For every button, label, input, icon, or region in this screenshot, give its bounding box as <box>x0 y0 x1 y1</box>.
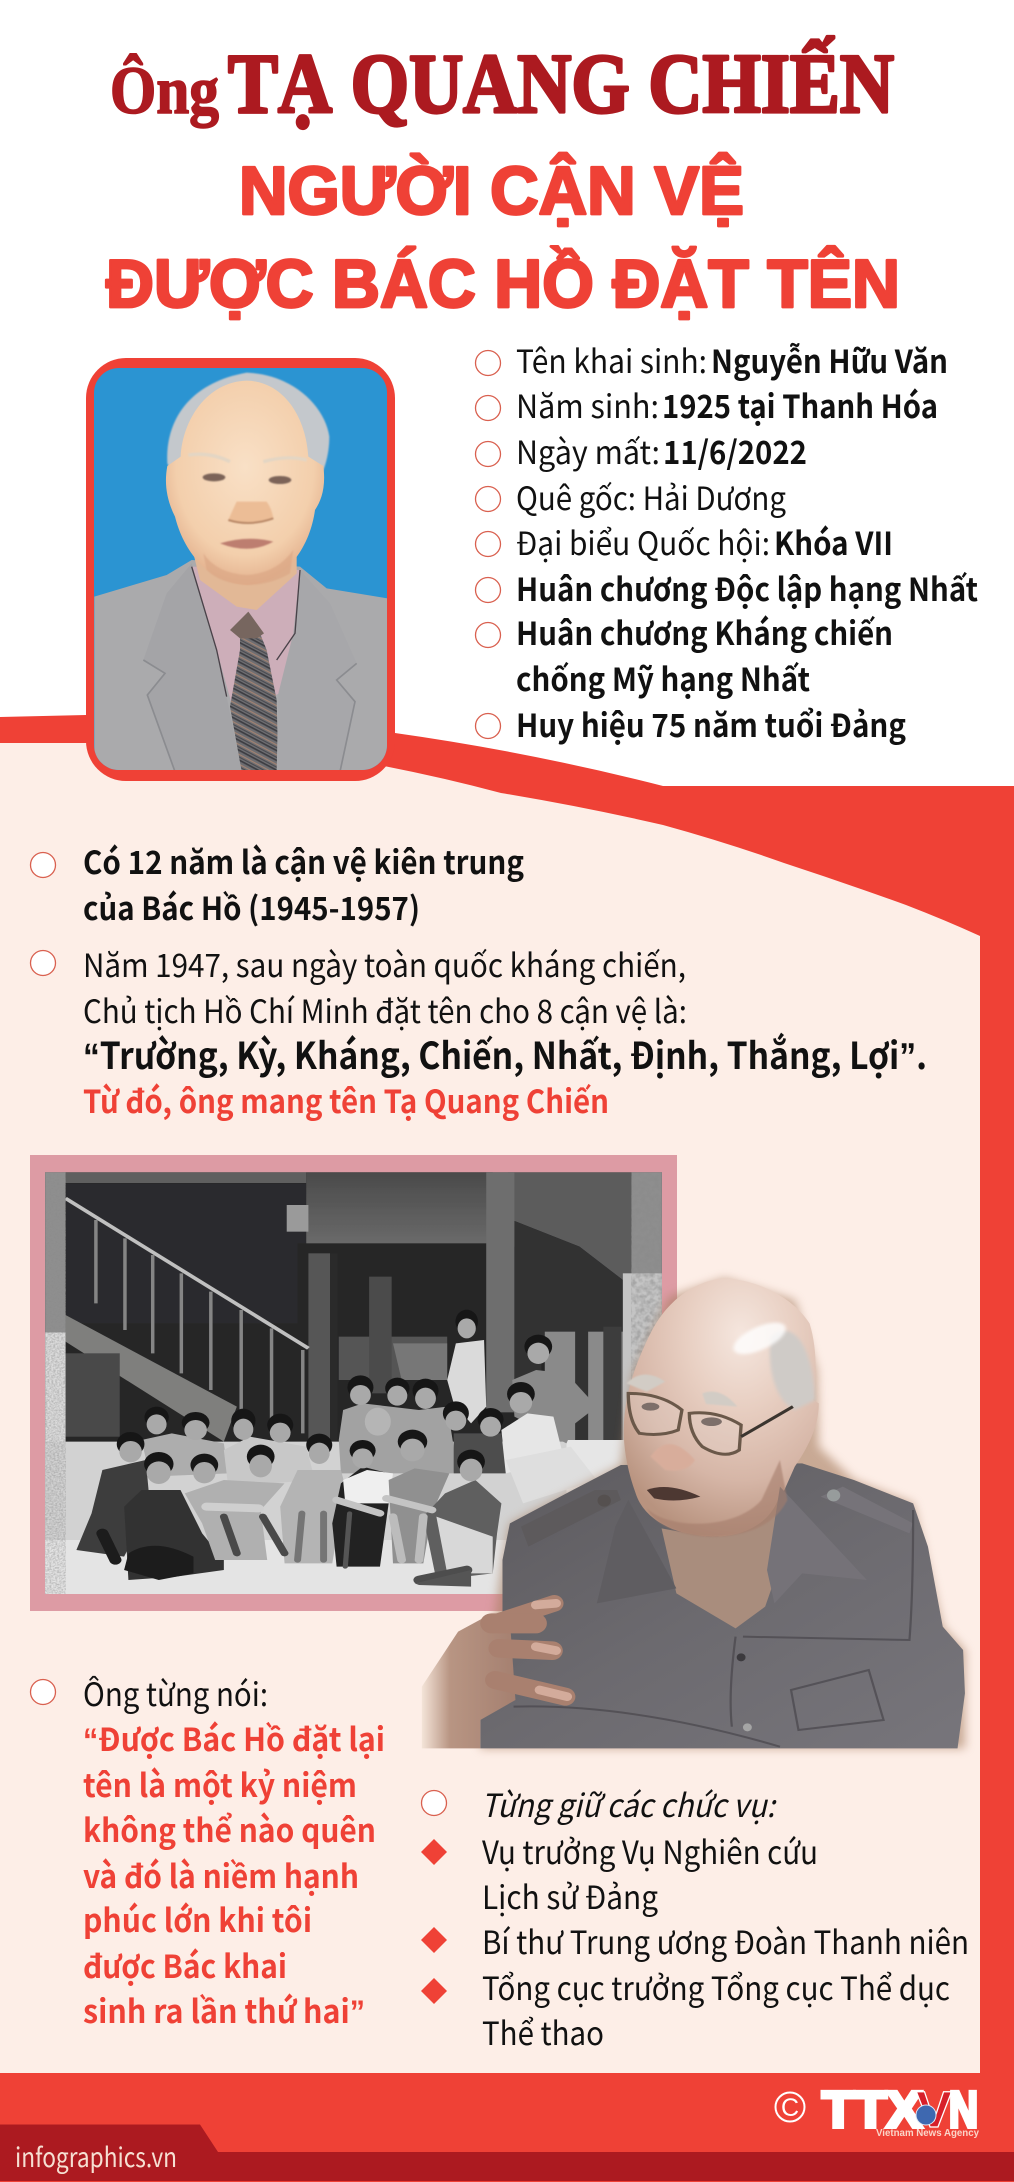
eyes <box>642 1403 659 1411</box>
lapels <box>192 566 242 770</box>
standing figures <box>447 1340 486 1423</box>
fact text lines: chống Mỹ hạng Nhất <box>516 655 810 701</box>
faces <box>119 1318 549 1484</box>
red background curve and side strip <box>0 715 1014 2182</box>
agency name: Vietnam News Agency <box>876 2128 979 2139</box>
fact text lines: Huân chương Kháng chiến <box>516 609 893 655</box>
shadow halo <box>480 1278 965 1748</box>
shirt folds <box>514 1510 913 1747</box>
diamond markers <box>421 1839 447 2004</box>
footer band <box>0 2124 1014 2181</box>
title line: Ông Tạ Quang Chiến: Ông <box>110 52 219 128</box>
bodyguard statement: Có 12 năm là cận vệ kiên trung <box>83 838 524 884</box>
quotation text: phúc lớn khi tôi <box>83 1896 312 1942</box>
copyright mark: C <box>781 2094 799 2122</box>
naming story: “Trường, Kỳ, Kháng, Chiến, Nhất, Định, Thắng, Lợi”. <box>83 1026 927 1080</box>
naming story <box>83 941 927 1123</box>
agency wordmark: TTX <box>822 2081 922 2138</box>
quotation text: “Được Bác Hồ đặt lại <box>83 1715 385 1761</box>
building <box>66 1172 306 1183</box>
bullets <box>30 852 56 976</box>
naming story: Chủ tịch Hồ Chí Minh đặt tên cho 8 cận vệ là: <box>83 987 687 1033</box>
positions held block <box>421 1781 969 2055</box>
suit <box>94 560 387 772</box>
arm and palm <box>422 1617 515 1748</box>
agency wordmark: V <box>916 2081 952 2138</box>
fact text lines: Huân chương Độc lập hạng Nhất <box>516 565 978 611</box>
positions: Thể thao <box>482 2009 604 2055</box>
grain on light edges <box>45 1172 66 1594</box>
portrait photo with red rounded frame <box>86 358 395 781</box>
fact text lines: Huy hiệu 75 năm tuổi Đảng <box>516 701 906 747</box>
positions: Vụ trưởng Vụ Nghiên cứu <box>482 1828 818 1874</box>
title <box>106 36 900 322</box>
career text block <box>30 838 927 1123</box>
fact text lines: Đại biểu Quốc hội: <box>516 519 770 565</box>
globe <box>916 2105 936 2125</box>
historic group photo in pink frame <box>30 1155 677 1611</box>
fact text lines: Năm sinh: <box>516 382 659 428</box>
quotation text: được Bác khai <box>83 1942 287 1988</box>
front row bodies <box>124 1490 224 1580</box>
copyright mark <box>776 2092 804 2122</box>
lower face shading <box>647 1460 787 1537</box>
naming story: Từ đó, ông mang tên Tạ Quang Chiến <box>83 1077 609 1123</box>
stair <box>66 1315 237 1442</box>
title line: Ông Tạ Quang Chiến: TẠ QUANG CHIẾN <box>228 36 894 131</box>
seated mid rows <box>339 1403 456 1473</box>
quotation text <box>83 1715 385 2033</box>
hair <box>167 373 329 483</box>
bullet <box>422 1790 446 1816</box>
facial features <box>188 454 307 585</box>
fact text lines: Nguyễn Hữu Văn <box>711 337 948 383</box>
mottled edges <box>45 1172 66 1332</box>
fact text lines: Quê gốc: Hải Dương <box>516 474 786 520</box>
heading: Từng giữ các chức vụ: <box>481 1781 777 1827</box>
fact text lines <box>516 337 978 747</box>
bodyguard statement: của Bác Hồ (1945-1957) <box>83 884 420 930</box>
head <box>166 381 324 585</box>
agency wordmark: N <box>949 2081 978 2138</box>
feet and dog <box>124 1546 193 1580</box>
fact text lines: 11/6/2022 <box>663 428 807 474</box>
hair <box>770 1331 815 1410</box>
forehead shine <box>728 1316 791 1361</box>
cream content panel <box>0 743 980 2073</box>
fact text lines: 1925 tại Thanh Hóa <box>662 382 938 428</box>
shirt <box>480 1463 965 1748</box>
ground <box>45 1442 566 1540</box>
quote intro: Ông từng nói: <box>83 1670 268 1716</box>
TTXVN logo <box>776 2081 979 2139</box>
hair <box>117 1310 552 1476</box>
neck <box>193 553 297 610</box>
quotation text: sinh ra lần thứ hai” <box>83 1987 365 2033</box>
neck and chest <box>662 1493 784 1628</box>
quotation text: không thể nào quên <box>83 1806 376 1852</box>
glasses <box>628 1393 741 1454</box>
positions: Lịch sử Đảng <box>482 1873 658 1919</box>
fact text lines: Ngày mất: <box>516 428 660 474</box>
arms and legs <box>102 1498 467 1580</box>
subtitle lines <box>106 152 900 322</box>
portrait of Tạ Quang Chiến gesturing <box>422 1278 965 1748</box>
positions <box>482 1828 969 2055</box>
collars <box>597 1500 676 1603</box>
naming story: Năm 1947, sau ngày toàn quốc kháng chiến, <box>83 941 686 987</box>
head <box>624 1278 819 1537</box>
subtitle lines: ĐƯỢC BÁC HỒ ĐẶT TÊN <box>106 245 900 322</box>
source label: infographics.vn <box>15 2136 177 2175</box>
quote block <box>30 1670 385 2033</box>
quotation text: tên là một kỷ niệm <box>83 1761 357 1807</box>
fingers <box>491 1603 565 1697</box>
bullet markers <box>476 350 500 738</box>
subtitle lines: NGƯỜI CẬN VỆ <box>239 152 744 229</box>
fact text lines: Tên khai sinh: <box>516 337 707 383</box>
positions: Bí thư Trung ương Đoàn Thanh niên <box>482 1918 969 1964</box>
agency wordmark <box>822 2081 978 2138</box>
fact list <box>476 337 978 747</box>
bullet <box>30 1680 56 1704</box>
quotation text: và đó là niềm hạnh <box>83 1852 359 1898</box>
positions: Tổng cục trưởng Tổng cục Thể dục <box>482 1964 950 2010</box>
columns <box>308 1253 330 1443</box>
fact text lines: Khóa VII <box>774 519 893 565</box>
bodyguard statement <box>83 838 524 930</box>
